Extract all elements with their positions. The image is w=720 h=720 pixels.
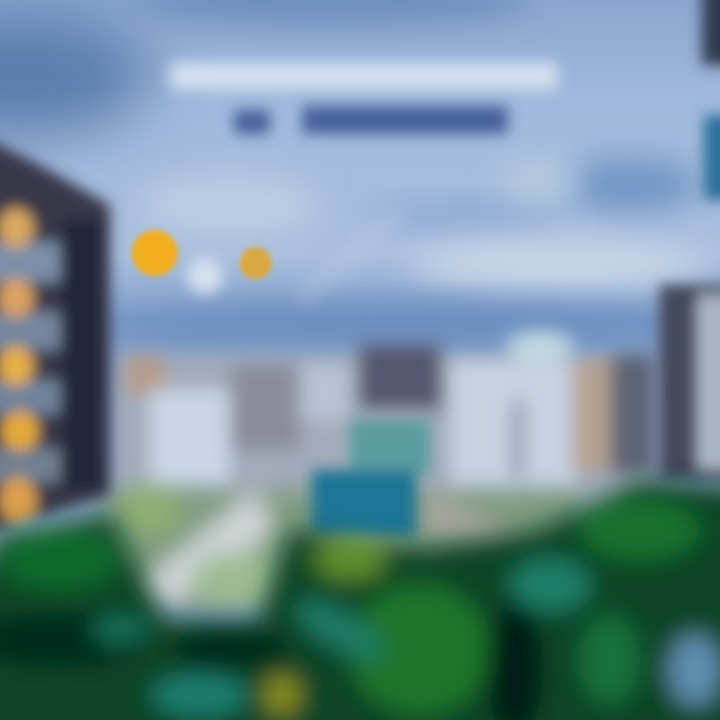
panel: ground and road [100,485,580,610]
icon: large yellow sun [132,230,178,276]
panel: left apartment tower [0,135,110,535]
heading: blurred white title bar [170,62,558,90]
panel: right apartment tower [660,0,720,480]
heading: blurred dark subtitle bar [234,106,508,134]
icon: small yellow sun [240,247,272,279]
panel: foreground foliage [0,480,720,720]
icon: white cloud dot [187,258,223,294]
panel: mid-distance buildings [115,331,655,525]
panel: teal central building [312,420,430,536]
